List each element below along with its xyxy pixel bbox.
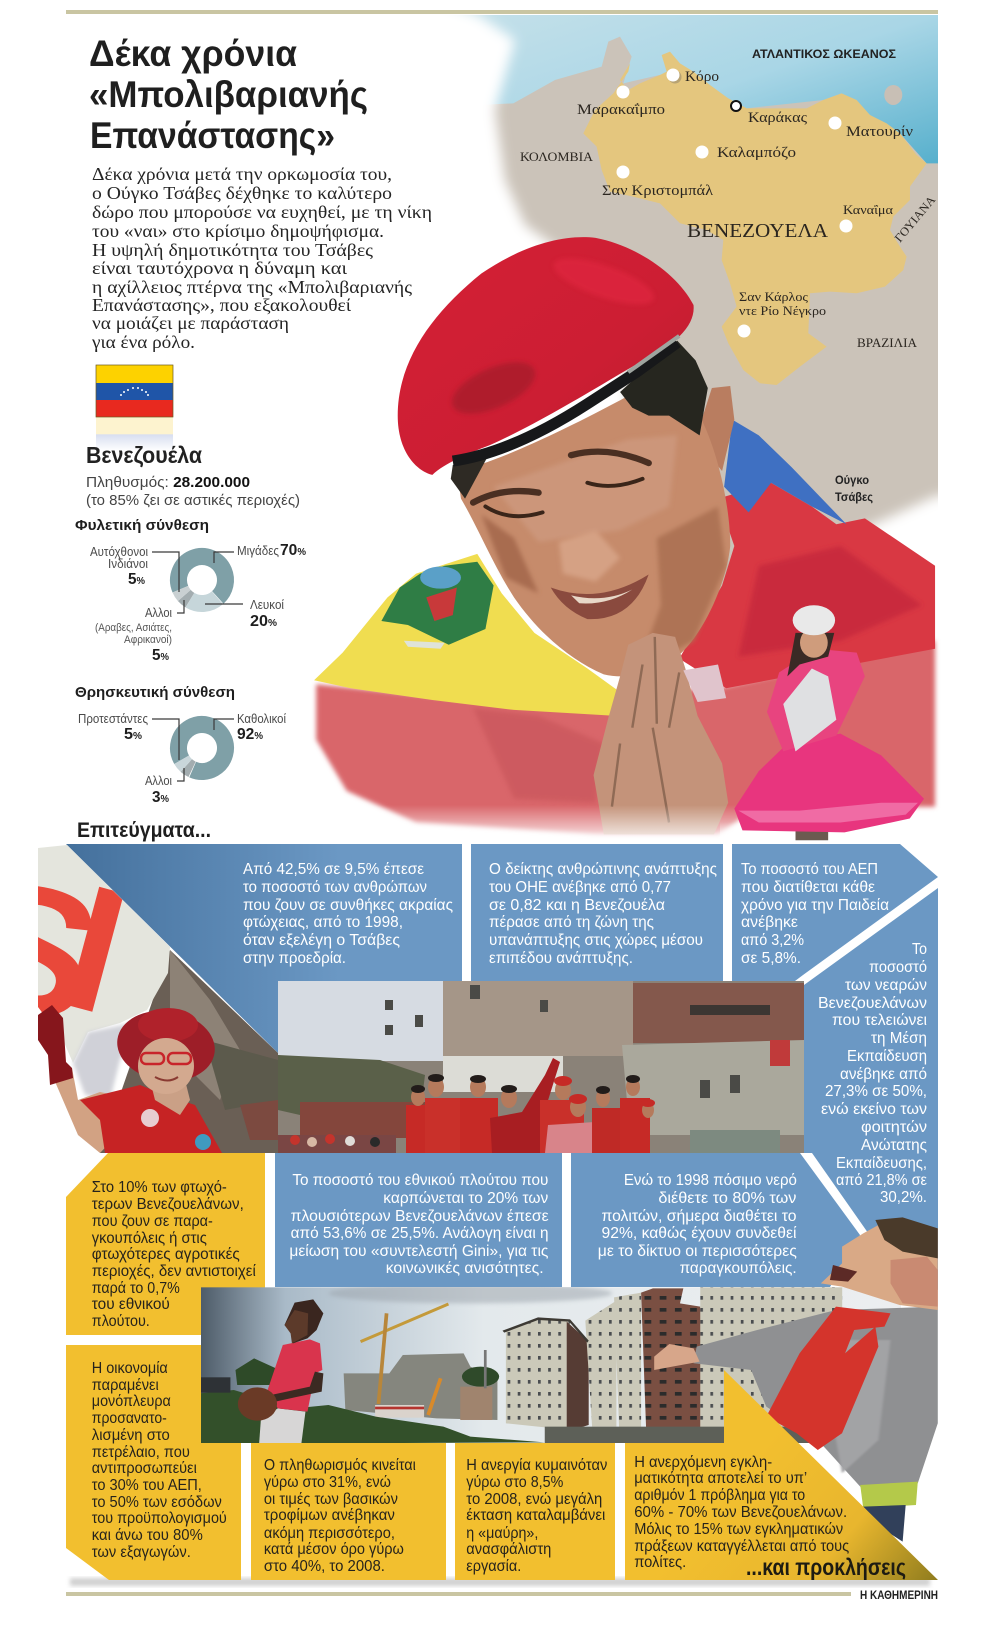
text: drinking water: παραγκουπόλεις. [680,1260,797,1277]
text: crime: πράξεων καταγγέλλεται από τους [634,1538,849,1555]
text: oil economy: και άνω του 80% [92,1527,203,1544]
map labels: Κόρο [685,69,719,85]
text: poorest tenth: φτωχότερες αγροτικές [92,1246,240,1263]
text: inflation: γύρω στο 31%, ενώ [264,1474,391,1491]
intro text [91,164,432,352]
text: human development: Ο δείκτης ανθρώπινης ανάπτυξης [489,861,717,878]
mouth [551,574,649,619]
text: unemployment: Η ανεργία κυμαινόταν [466,1457,607,1474]
donut chart: ethnic composition: (Αραβες, Ασιάτες, [95,622,172,634]
text: crime: ματικότητα αποτελεί το υπ’ [634,1470,807,1487]
intro text: είναι ταυτόχρονα η δύναμη και [92,258,347,278]
text: youth education: Ανώτατης [861,1137,927,1154]
donut chart: ethnic composition: 5% [128,571,145,588]
map labels: ΚΟΛΟΜΒΙΑ [520,149,594,164]
text: national wealth [289,1172,549,1277]
text: crime: αριθμόν 1 πρόβλημα για το [634,1487,805,1504]
praying hands [594,633,728,834]
text: national wealth: κοινωνικές ανισότητες. [386,1260,544,1277]
heading: challenges: ...και προκλήσεις [746,1554,906,1580]
donut chart: ethnic composition [90,542,306,664]
panel: poorest tenth [66,1153,265,1335]
text: unemployment: γύρω στο 8,5% [466,1474,563,1491]
donut chart: ethnic composition: Ινδιάνοι [108,556,148,571]
donut chart: religious composition: 5% [124,726,142,743]
text: education spending: χρόνο για την Παιδεία [741,897,889,914]
text: oil economy [92,1360,227,1561]
text: youth education: ανέβηκε από [840,1066,927,1083]
photo: slum background left [100,950,278,1153]
panel: national wealth [275,1153,562,1287]
photo: Hugo Chavez with flag [314,237,935,834]
donut chart: religious composition: Καθολικοί [237,711,286,726]
photo: boy and new housing blocks [200,1283,910,1444]
text: inflation: ακόμη περισσότερο, [264,1525,395,1542]
photo caption [835,475,873,504]
intro text: η αχίλλειος πτέρνα της «Μπολιβαριανής [92,277,412,297]
text: inflation [264,1457,416,1575]
country shape: Venezuela [583,52,927,385]
blue flag [724,420,847,524]
text: poorest tenth: τερων Βενεζουελάνων, [92,1196,244,1213]
text: youth education: 30,2%. [880,1189,927,1206]
country facts: Πληθυσμός: 28.200.000 [86,474,250,491]
photo: woman with SI sign [38,845,222,1153]
text: oil economy: το 30% του ΑΕΠ, [92,1477,202,1494]
text: unemployment: η «μαύρη», [466,1525,538,1542]
text: crime [634,1454,849,1571]
text: drinking water: διέθετε το 80% των [658,1190,796,1207]
text: human development: πέρασε από τη ζώνη της [489,914,654,931]
text: unemployment: εργασία. [466,1558,521,1575]
text: national wealth: από 53,6% σε 25,5%. Ανάλογη είναι η [291,1225,549,1242]
text: youth education: ποσοστό [869,959,927,976]
waistband and jeans [860,1482,918,1508]
intro text: του «ναι» στο κρίσιμο δημοψήφισμα. [92,221,384,241]
photo caption: Ούγκο [835,475,869,487]
intro text: Επανάστασης», που εξακολουθεί [92,295,351,315]
panel: poverty [66,844,462,1053]
text: poorest tenth: πλούτου. [92,1313,150,1330]
text: youth education: 27,3% σε 50%, [825,1083,927,1100]
intro text: για ένα ρόλο. [91,332,195,352]
panel: unemployment [455,1443,615,1580]
sign lettering: I [46,846,145,1052]
top rule [66,10,938,14]
text: poverty: στην προεδρία. [243,950,346,967]
intro text: ο Ούγκο Τσάβες δέχθηκε το καλύτερο [92,183,392,203]
text: inflation: στο 40%, το 2008. [264,1558,385,1575]
sign lettering [38,886,122,1013]
text: oil economy: αντιπροσωπεύει [92,1460,197,1477]
donut chart: ethnic composition: Αφρικανοί) [124,634,172,646]
text: unemployment [466,1457,607,1575]
map labels: Καράκας [748,110,807,126]
text: drinking water: πολιτών, σήμερα διαθέτει το [602,1208,797,1225]
map labels [520,47,939,350]
intro text: Η υψηλή δημοτικότητα του Τσάβες [92,240,373,260]
boy in red shirt [238,1299,323,1443]
flag coat of arms [381,562,494,649]
text: oil economy: του προϋπολογισμού [92,1510,227,1527]
text: oil economy: πετρέλαιο, που [92,1444,190,1461]
text: poorest tenth [92,1179,256,1330]
text: human development: υπανάπτυξης στις χώρες μέσου [489,932,703,949]
text: youth education: Βενεζουελάνων [818,995,927,1012]
text: youth education [818,941,927,1206]
face [457,388,730,676]
text: youth education: των νεαρών [845,977,927,994]
map labels: ΒΡΑΖΙΛΙΑ [857,335,918,350]
panel: oil economy [66,1345,241,1580]
text: oil economy: παραμένει [92,1377,159,1394]
text: oil economy: των εξαγωγών. [92,1544,191,1561]
text: youth education: Εκπαίδευσης, [836,1155,927,1172]
panel: education spending [732,844,938,981]
text: youth education: από 21,8% σε [836,1172,927,1189]
arm [50,1068,122,1153]
panel: human development [471,844,723,981]
neck and face [150,1080,190,1115]
hair [620,341,708,435]
donut chart: religious composition: Αλλοι [145,773,172,788]
beret [398,237,694,475]
text: poverty: που ζουν σε συνθήκες ακραίας [243,897,453,914]
text: youth education: Εκπαίδευση [847,1048,927,1065]
donut chart: ethnic composition: Αλλοι [145,605,172,620]
title [89,33,368,156]
donut chart: ethnic composition: 70% [280,542,306,559]
text: education spending [741,861,889,967]
text: poorest tenth: που ζουν σε παρα- [92,1213,213,1230]
credit: newspaper name: Η ΚΑΘΗΜΕΡΙΝΗ [860,1588,938,1602]
flag of Venezuela [96,365,173,451]
text: crime: 60% - 70% των Βενεζουελάνων. [634,1504,847,1521]
small crowd at left [278,1134,396,1153]
dress [80,1085,222,1153]
heading: religious composition: Θρησκευτική σύνθεση [75,684,235,701]
heading: achievements: Επιτεύγματα... [77,819,211,842]
donut chart: ethnic composition: 20% [250,613,277,630]
map labels: Ματουρίν [846,124,913,140]
map labels: Καλαμπόζο [717,145,796,161]
scarf [766,1307,891,1450]
country facts: Βενεζουέλα [86,442,202,468]
text: education spending: Το ποσοστό του ΑΕΠ [741,861,878,878]
red flag drape [679,483,935,688]
hand [654,1344,700,1370]
donut chart: religious composition: 92% [237,726,263,743]
text: oil economy: λισμένη στο [92,1427,170,1444]
text: poorest tenth: του εθνικού [92,1296,170,1313]
text: poorest tenth: παρά το 0,7% [92,1280,180,1297]
hoodie [694,1307,938,1487]
collar patch [683,664,726,702]
yellow flag [314,554,620,716]
title: Δέκα χρόνια [89,33,297,74]
text: national wealth: πλουσιότερων Βενεζουελάνων έπεσε [291,1208,549,1225]
text: poverty: Από 42,5% σε 9,5% έπεσε [243,861,424,878]
crowd in red [406,1058,655,1153]
donut chart: ethnic composition: Αυτόχθονοι [90,544,148,559]
panel: drinking water [571,1153,860,1287]
intro text: να μοιάζει με παράσταση [92,313,289,333]
hat [113,1005,219,1094]
text: education spending: από 3,2% [741,932,804,949]
photo caption: Τσάβες [835,492,873,504]
text: national wealth: μείωση του «συντελεστή Gini», για τις [289,1243,549,1260]
text: drinking water: με το δίκτυο οι περισσότερες [598,1243,797,1260]
text: youth education: που τελειώνει [832,1012,927,1029]
photo: boy with red scarf [654,1217,938,1542]
donut chart: ethnic composition: 5% [152,647,169,664]
text: poorest tenth: γκουπόλεις ή στις [92,1230,207,1247]
donut chart: religious composition: 3% [152,789,169,806]
glasses [141,1053,191,1064]
text: crime: Μόλις το 15% των εγκληματικών [634,1521,843,1538]
construction [344,1353,497,1420]
text: poorest tenth: Στο 10% των φτωχό- [92,1179,227,1196]
country facts [86,442,300,509]
text: poverty: το ποσοστό των ανθρώπων [243,879,427,896]
text: oil economy: μονόπλευρα [92,1393,171,1410]
text: human development: επιπέδου ανάπτυξης. [489,950,633,967]
text: human development [489,861,717,967]
text: poverty: φτώχειας, από το 1998, [243,914,403,931]
map labels: Μαρακαΐμπο [577,102,665,118]
map labels: ντε Ρίο Νέγκρο [739,303,826,318]
beret band [453,343,677,461]
text: national wealth: Το ποσοστό του εθνικού πλούτου που [292,1172,548,1189]
text: poverty [243,861,453,967]
title: «Μπολιβαριανής [89,74,368,115]
badges [141,1109,159,1127]
head [821,1218,938,1310]
ear [702,386,734,471]
text: oil economy: Η οικονομία [92,1360,168,1377]
text: education spending: ανέβηκε [741,914,798,931]
panel: crime [625,1370,938,1580]
text: crime: πολίτες. [634,1554,686,1571]
text: inflation: Ο πληθωρισμός κινείται [264,1457,416,1474]
glove [38,1005,73,1085]
photo: crowd with Chavez in slums [278,981,804,1153]
map labels: Σαν Κάρλος [739,289,809,304]
text: unemployment: ανασφάλιστη [466,1541,551,1558]
donut chart: religious composition: Προτεστάντες [78,711,148,726]
donut chart: ethnic composition: Λευκοί [250,597,284,612]
intro text: δώρο που μπορούσε να ευχηθεί, με τη νίκη [92,202,432,222]
grass [200,1390,545,1444]
soft shadow under lower panels [70,1578,930,1586]
text: youth education: φοιτητών [861,1119,927,1136]
text: crime: Η ανερχόμενη εγκλη- [634,1454,772,1471]
donut chart: religious composition [78,711,286,806]
text: drinking water: Ενώ το 1998 πόσιμο νερό [624,1172,797,1189]
text: oil economy: προσανατο- [92,1410,167,1427]
text: unemployment: έκταση καταλαμβάνει [466,1507,606,1524]
text: inflation: κατά μέσον όρο γύρω [264,1541,404,1558]
text: unemployment: το 2008, ενώ μεγάλη [466,1491,602,1508]
photo: dancer in pink dress [734,605,924,840]
panel: inflation [251,1443,446,1580]
text: education spending: που διατίθεται κάθε [741,879,875,896]
text: education spending: σε 5,8%. [741,950,801,967]
text: human development: σε 0,82 και η Βενεζουέλα [489,897,665,914]
map labels: Καναΐμα [843,202,893,217]
text: youth education: ενώ εκείνο των [821,1101,927,1118]
country facts: (το 85% ζει σε αστικές περιοχές) [86,492,300,509]
text: human development: του ΟΗΕ ανέβηκε από 0,77 [489,879,671,896]
text: inflation: τροφίμων ανέβηκαν [264,1507,395,1524]
text: youth education: τη Μέση [871,1030,927,1047]
text: drinking water: 92%, καθώς έχουν συνδεθεί [602,1225,797,1242]
panel: map of Venezuela [460,15,938,592]
eyes and brows [473,452,649,516]
map labels: ΑΤΛΑΝΤΙΚΟΣ ΩΚΕΑΝΟΣ [752,47,896,61]
donut chart: ethnic composition: Μιγάδες [237,543,279,558]
building blocks [506,1318,570,1430]
map labels: Σαν Κριστομπάλ [602,183,714,199]
map labels: ΓΟΥΙΑΝΑ [892,193,939,245]
map labels: ΒΕΝΕΖΟΥΕΛΑ [687,220,829,242]
bottom rule [66,1592,851,1596]
text: oil economy: το 50% των εσόδων [92,1494,222,1511]
shirt [316,641,935,834]
text: inflation: οι τιμές των βασικών [264,1491,398,1508]
text: youth education: Το [912,941,927,958]
panel: youth education [804,888,938,1290]
title: Επανάστασης» [90,115,335,156]
text: drinking water [598,1172,797,1277]
text: poorest tenth: περιοχές, δεν αντιστοιχεί [92,1263,256,1280]
heading: ethnic composition: Φυλετική σύνθεση [75,517,209,534]
text: national wealth: καρπώνεται το 20% των [383,1190,548,1207]
intro text: Δέκα χρόνια μετά την ορκωμοσία του, [92,164,392,184]
text: poverty: όταν εξελέγη ο Τσάβες [243,932,400,949]
